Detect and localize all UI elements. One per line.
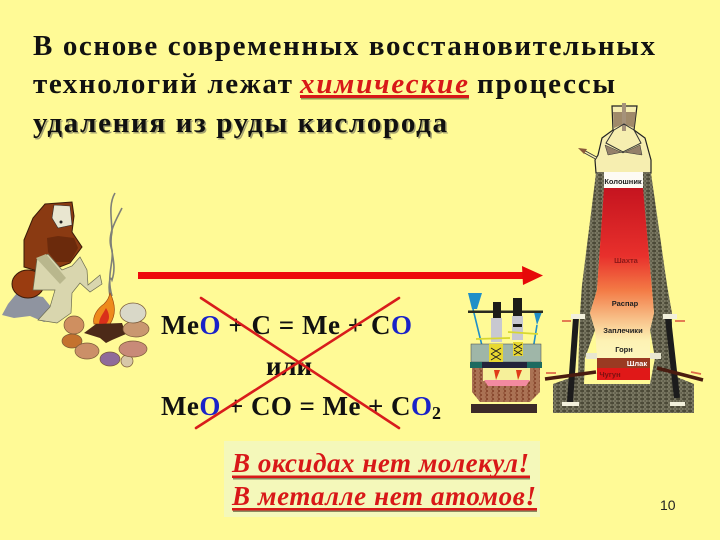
title: технологий лежат — [33, 68, 292, 100]
title: В основе современных восстановительных — [33, 30, 656, 62]
smoke — [109, 193, 122, 296]
furnace roof — [471, 344, 541, 362]
caveman — [2, 202, 102, 323]
flame — [94, 293, 114, 324]
furnace zone labels: Шахта — [614, 256, 639, 265]
illustration: blast furnace — [545, 103, 703, 413]
equations: 2 — [432, 403, 441, 423]
callout — [224, 441, 540, 517]
furnace zone labels: Колошник — [604, 177, 642, 186]
support columns — [570, 318, 677, 402]
furnace zone labels: Распар — [612, 299, 639, 308]
logs — [84, 323, 126, 343]
brick bowl — [472, 368, 540, 402]
shaft interior — [590, 188, 654, 358]
brick walls and base — [553, 173, 694, 413]
title — [33, 30, 656, 140]
title: процессы — [477, 68, 615, 100]
equations: или — [266, 351, 312, 381]
highlighted word: химические: химические — [299, 68, 468, 100]
furnace top — [595, 106, 651, 173]
page number: 10 — [660, 497, 676, 513]
red cross — [196, 298, 399, 428]
stones — [62, 303, 149, 367]
illustration: electric arc furnace — [468, 293, 543, 413]
hoppers and feed tubes — [468, 293, 482, 309]
arrow — [138, 266, 543, 285]
gas outlet — [585, 152, 596, 158]
furnace zone labels: Заплечики — [603, 326, 643, 335]
furnace base — [471, 404, 537, 413]
illustration: caveman at campfire — [2, 193, 149, 367]
electrodes — [468, 310, 543, 313]
tapping pipes — [545, 368, 703, 380]
furnace zone labels — [599, 177, 647, 379]
hearth — [597, 358, 650, 369]
furnace zone labels: Горн — [615, 345, 633, 354]
equations — [161, 310, 441, 423]
callout: В оксидах нет молекул! — [231, 448, 529, 478]
equations: MeO + CO = Me + CO — [161, 391, 432, 421]
equations: MeO + C = Me + CO — [161, 310, 412, 340]
callout: В металле нет атомов! — [231, 481, 536, 511]
title: удаления из руды кислорода — [34, 108, 449, 140]
furnace zone labels: Шлак — [627, 359, 647, 368]
furnace zone labels: Чугун — [599, 370, 621, 379]
title: удаления из руды кислорода — [33, 107, 448, 139]
